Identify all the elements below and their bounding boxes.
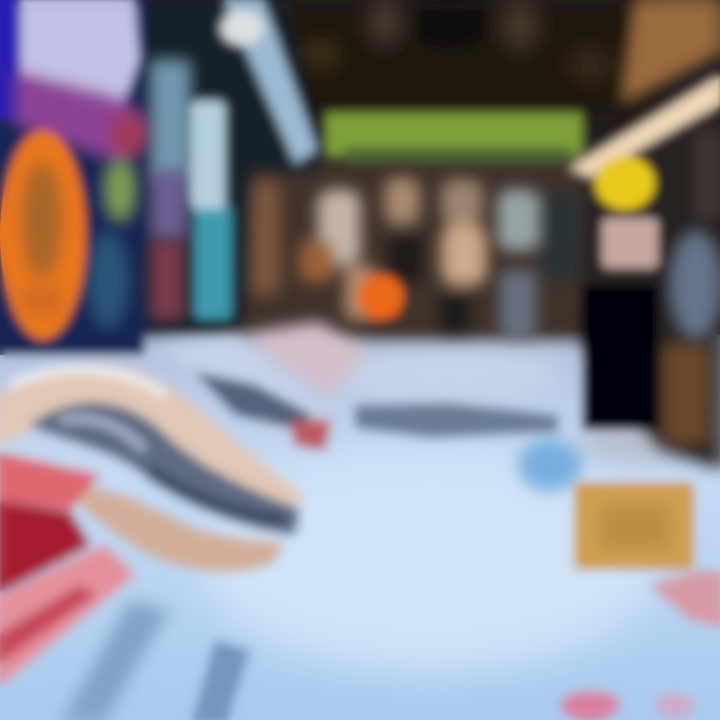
tan box xyxy=(574,482,694,570)
pink sign xyxy=(602,218,658,268)
right wall xyxy=(580,95,720,470)
skateboard display: top centre xyxy=(160,322,558,450)
red boards bottom left xyxy=(0,453,135,686)
floor xyxy=(0,335,720,720)
skateboard display: wavy boards left xyxy=(0,365,305,572)
pink items bottom right xyxy=(560,570,720,719)
blue floor patch xyxy=(518,439,582,491)
ceiling light beam xyxy=(568,0,720,178)
black column xyxy=(582,285,658,430)
ceiling xyxy=(280,0,650,115)
yellow sign xyxy=(595,156,655,210)
mural wall xyxy=(0,0,148,355)
orange oval on mural xyxy=(0,130,86,340)
orange ball xyxy=(358,274,404,320)
shelf wall xyxy=(240,155,590,340)
floor stripes xyxy=(61,600,250,720)
dark column and window streak xyxy=(125,0,320,335)
green banner xyxy=(325,112,583,162)
